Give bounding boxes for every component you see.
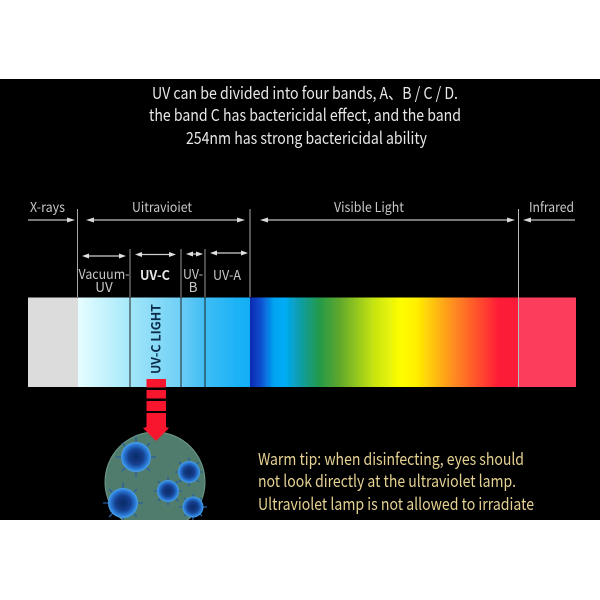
intro text block (149, 80, 461, 149)
warm tip text block: Warm tip: when disinfecting, eyes should (258, 446, 524, 470)
top range labels (30, 196, 574, 216)
black background panel (0, 79, 600, 520)
sub-band labels: Vacuum- (78, 263, 130, 283)
sub-band labels: UV-C (140, 264, 170, 284)
top range labels: Visible Light (334, 196, 404, 216)
sub-band labels: UV (95, 276, 113, 296)
icon: bacteria petri circle (103, 432, 207, 520)
warm tip text block: Ultraviolet lamp is not allowed to irradiate (258, 491, 534, 515)
sub-band labels: UV-A (213, 264, 242, 284)
intro text block: the band C has bactericidal effect, and the band (149, 102, 461, 126)
top range labels: Infrared (529, 196, 574, 216)
icon: red down arrow (143, 379, 169, 441)
sub-band arrows (82, 250, 248, 258)
intro text block: 254nm has strong bactericidal ability (186, 125, 427, 149)
warm tip text block (258, 446, 534, 515)
UV-C LIGHT vertical label: UV-C LIGHT (146, 304, 164, 374)
warm tip text block: not look directly at the ultraviolet lamp. (258, 468, 516, 492)
top range labels: Uitravioiet (132, 196, 192, 216)
spectrum bar (28, 298, 576, 387)
sub-band labels (78, 263, 242, 296)
virus cluster (103, 437, 207, 523)
sub-band labels: B (189, 276, 198, 296)
top range arrows (28, 218, 575, 222)
top range labels: X-rays (30, 196, 65, 216)
sub-band labels: UV- (183, 263, 203, 283)
intro text block: UV can be divided into four bands, A、B / C / D. (152, 80, 458, 104)
band divider lines (78, 209, 518, 387)
